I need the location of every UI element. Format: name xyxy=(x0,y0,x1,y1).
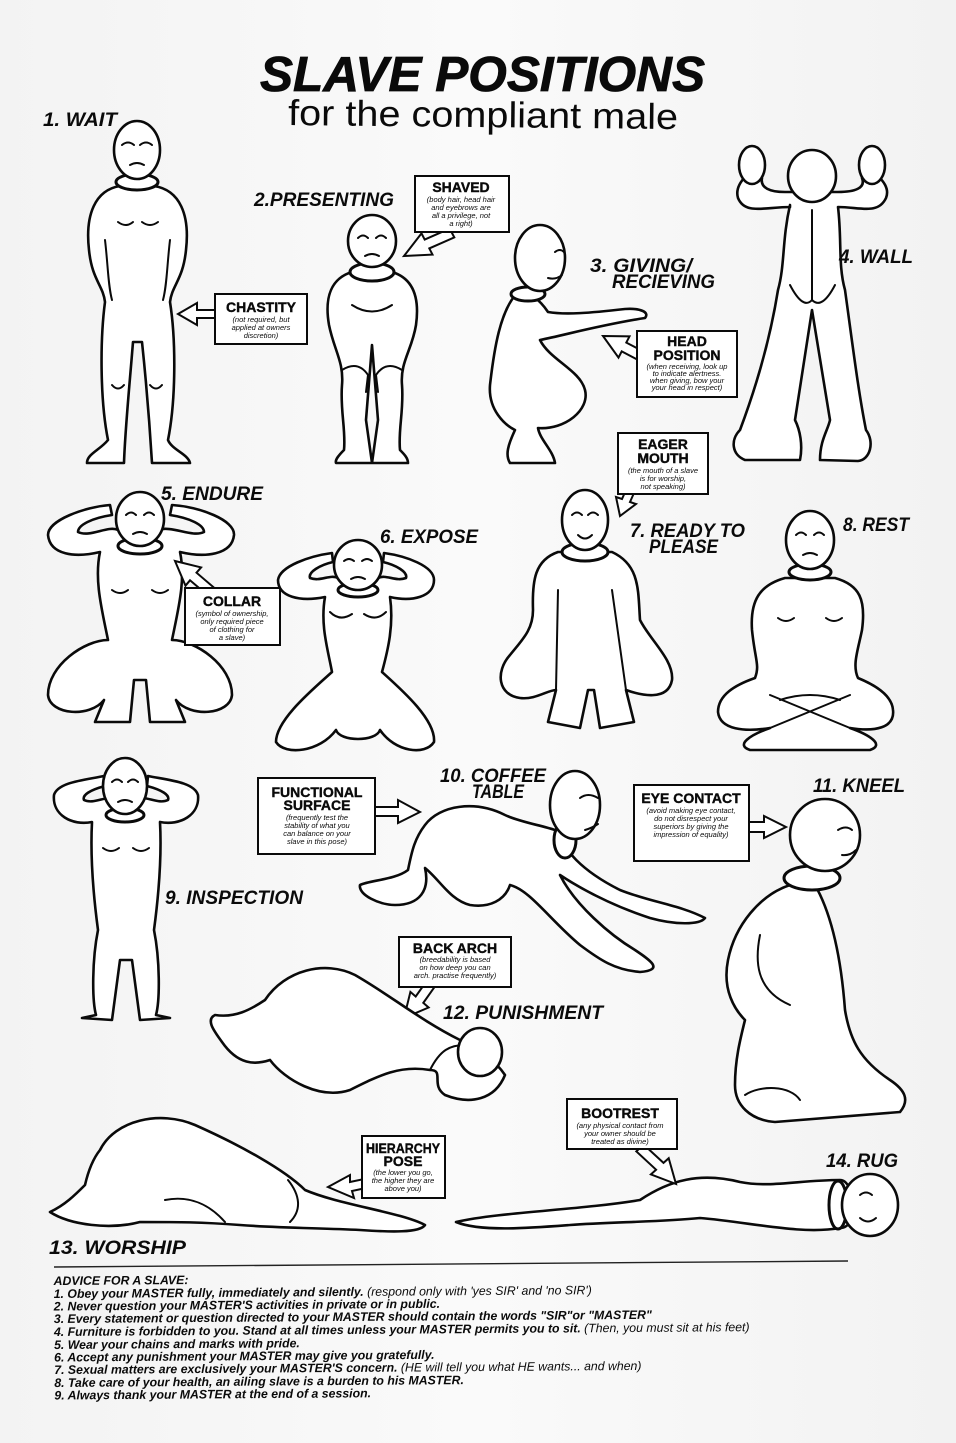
callout: eye contact: EYE CONTACT xyxy=(641,790,741,806)
callout: functional surface: (frequently test the xyxy=(286,813,348,822)
callout: chastity: discretion) xyxy=(244,331,279,340)
label: 8. rest: 8. REST xyxy=(843,515,910,536)
callout: eye contact xyxy=(634,785,786,861)
divider xyxy=(54,1261,848,1267)
callout: eye contact: impression of equality) xyxy=(653,830,729,839)
callout: head position: your head in respect) xyxy=(651,383,723,392)
advice text block: 9. Always thank your MASTER at the end of a session. xyxy=(54,1386,371,1402)
callout: back arch: on how deep you can xyxy=(419,963,491,972)
figure 11: kneel xyxy=(726,799,905,1122)
callout: eager mouth: MOUTH xyxy=(637,450,689,466)
advice text block: 4. Furniture is forbidden to you. Stand at all times unless your MASTER permits you to sit. (Then, you must sit at his feet) xyxy=(53,1320,750,1339)
callout: back arch: (breedability is based xyxy=(420,955,491,964)
title: SLAVE POSITIONS xyxy=(260,48,705,102)
callout: shaved: all a privilege, not xyxy=(432,211,491,220)
callout: back arch: arch. practise frequently) xyxy=(414,971,497,980)
callout: eager mouth: EAGER xyxy=(638,436,688,452)
figure 3: giving / recieving xyxy=(490,225,646,463)
figure 7: ready to please xyxy=(501,490,672,728)
callout: head position xyxy=(603,331,737,397)
label: 9. inspection: 9. INSPECTION xyxy=(165,888,304,909)
callout: back arch: BACK ARCH xyxy=(413,940,497,956)
callout: functional surface xyxy=(258,778,420,854)
advice text block: 7. Sexual matters are exclusively your MASTER'S concern. (HE will tell you what HE wants... and when) xyxy=(54,1359,642,1377)
label: 7. ready to please: 7. READY TO xyxy=(630,521,745,542)
callout: head position: to indicate alertness. xyxy=(653,369,721,378)
advice text block: 8. Take care of your health, an ailing slave is a burden to his MASTER. xyxy=(54,1373,464,1390)
figure 2: presenting xyxy=(328,215,417,463)
figure 12: punishment xyxy=(211,968,505,1100)
callout: eager mouth: not speaking) xyxy=(640,482,686,491)
callout: back arch xyxy=(399,937,511,1018)
callout: hierarchy pose xyxy=(328,1136,445,1198)
advice text block: 5. Wear your chains and marks with pride. xyxy=(54,1336,300,1352)
callout: eager mouth: is for worship, xyxy=(640,474,686,483)
callout: hierarchy pose: the higher they are xyxy=(372,1176,434,1185)
advice text block: 1. Obey your MASTER fully, immediately and silently. (respond only with 'yes SIR' and 'no SIR') xyxy=(54,1283,592,1301)
label: 13. worship: 13. WORSHIP xyxy=(49,1238,186,1259)
label: 1. wait: 1. WAIT xyxy=(43,110,118,131)
figure 5: endure xyxy=(48,492,234,722)
callout: chastity: applied at owners xyxy=(232,323,291,332)
callout: shaved: SHAVED xyxy=(432,179,490,195)
label: please: PLEASE xyxy=(649,537,719,558)
callout: eye contact: (avoid making eye contact, xyxy=(646,806,736,815)
callout: bootrest: (any physical contact from xyxy=(576,1121,664,1130)
figure 6: expose xyxy=(276,540,434,750)
subtitle: for the compliant male xyxy=(288,92,678,137)
callout: bootrest xyxy=(567,1099,677,1184)
figure 8: rest xyxy=(718,511,893,750)
figure 13: worship xyxy=(50,1118,425,1231)
label: 2. presenting: 2.PRESENTING xyxy=(253,190,394,211)
callout: collar: a slave) xyxy=(219,633,246,642)
callout: functional surface: FUNCTIONAL xyxy=(272,784,363,800)
callout: head position: HEAD xyxy=(667,333,707,349)
callout: collar: COLLAR xyxy=(203,593,261,609)
label: recieving: RECIEVING xyxy=(612,272,715,293)
figure 10: coffee table xyxy=(360,771,705,972)
callout: shaved: (body hair, head hair xyxy=(427,195,496,204)
callout: hierarchy pose: HIERARCHY xyxy=(366,1140,441,1156)
callout: collar: only required piece xyxy=(200,617,264,626)
callout: functional surface: slave in this pose) xyxy=(287,837,348,846)
label: 10. coffee table: 10. COFFEE xyxy=(440,766,547,787)
label: table: TABLE xyxy=(472,782,525,803)
callout: head position: when giving, bow your xyxy=(650,376,725,385)
figure 1: wait xyxy=(87,121,190,463)
advice text block: ADVICE FOR A SLAVE: xyxy=(53,1273,188,1288)
callout: functional surface: stability of what you xyxy=(284,821,351,830)
label: 6. expose: 6. EXPOSE xyxy=(380,527,479,548)
callout: shaved xyxy=(404,176,509,256)
callout: collar: (symbol of ownership, xyxy=(196,609,268,618)
callout: eye contact: do not disrespect your xyxy=(654,814,728,823)
label: 12. punishment: 12. PUNISHMENT xyxy=(443,1003,604,1024)
advice text block: 3. Every statement or question directed to your MASTER should contain the words "SIR"or "MASTER" xyxy=(54,1308,652,1326)
label: 14. rug: 14. RUG xyxy=(826,1151,898,1172)
callout: functional surface: SURFACE xyxy=(284,797,350,813)
callout: chastity: (not required, but xyxy=(232,315,290,324)
callout: hierarchy pose: above you) xyxy=(384,1184,422,1193)
callout: head position: (when receiving, look up xyxy=(647,362,727,371)
callout: eager mouth xyxy=(616,433,708,516)
callout: bootrest: treated as divine) xyxy=(591,1137,649,1146)
figure 14: rug xyxy=(456,1174,898,1236)
callout: functional surface: can balance on your xyxy=(283,829,351,838)
label: 5. endure: 5. ENDURE xyxy=(161,484,264,505)
callout: bootrest: BOOTREST xyxy=(581,1105,659,1121)
figure 9: inspection xyxy=(54,758,198,1020)
callout: head position: POSITION xyxy=(654,347,720,363)
callout: hierarchy pose: POSE xyxy=(384,1153,422,1169)
callout: collar xyxy=(175,561,280,645)
callout: bootrest: your owner should be xyxy=(583,1129,656,1138)
advice text block: 6. Accept any punishment your MASTER may give you gratefully. xyxy=(54,1348,435,1364)
callout: chastity xyxy=(178,294,307,344)
callout: eye contact: superiors by giving the xyxy=(653,822,729,831)
callout: hierarchy pose: (the lower you go, xyxy=(373,1168,433,1177)
callout: eager mouth: (the mouth of a slave xyxy=(628,466,698,475)
callout: chastity: CHASTITY xyxy=(226,299,297,315)
callout: shaved: a right) xyxy=(449,219,473,228)
callout: shaved: and eyebrows are xyxy=(431,203,491,212)
advice text block: 2. Never question your MASTER'S activities in private or in public. xyxy=(53,1297,440,1314)
label: 3. giving / recieving: 3. GIVING/ xyxy=(590,256,694,277)
label: 11. kneel: 11. KNEEL xyxy=(813,776,905,797)
figure 4: wall xyxy=(734,146,887,461)
label: 4. wall: 4. WALL xyxy=(838,247,913,268)
advice text block xyxy=(53,1269,750,1403)
callout: collar: of clothing for xyxy=(209,625,255,634)
